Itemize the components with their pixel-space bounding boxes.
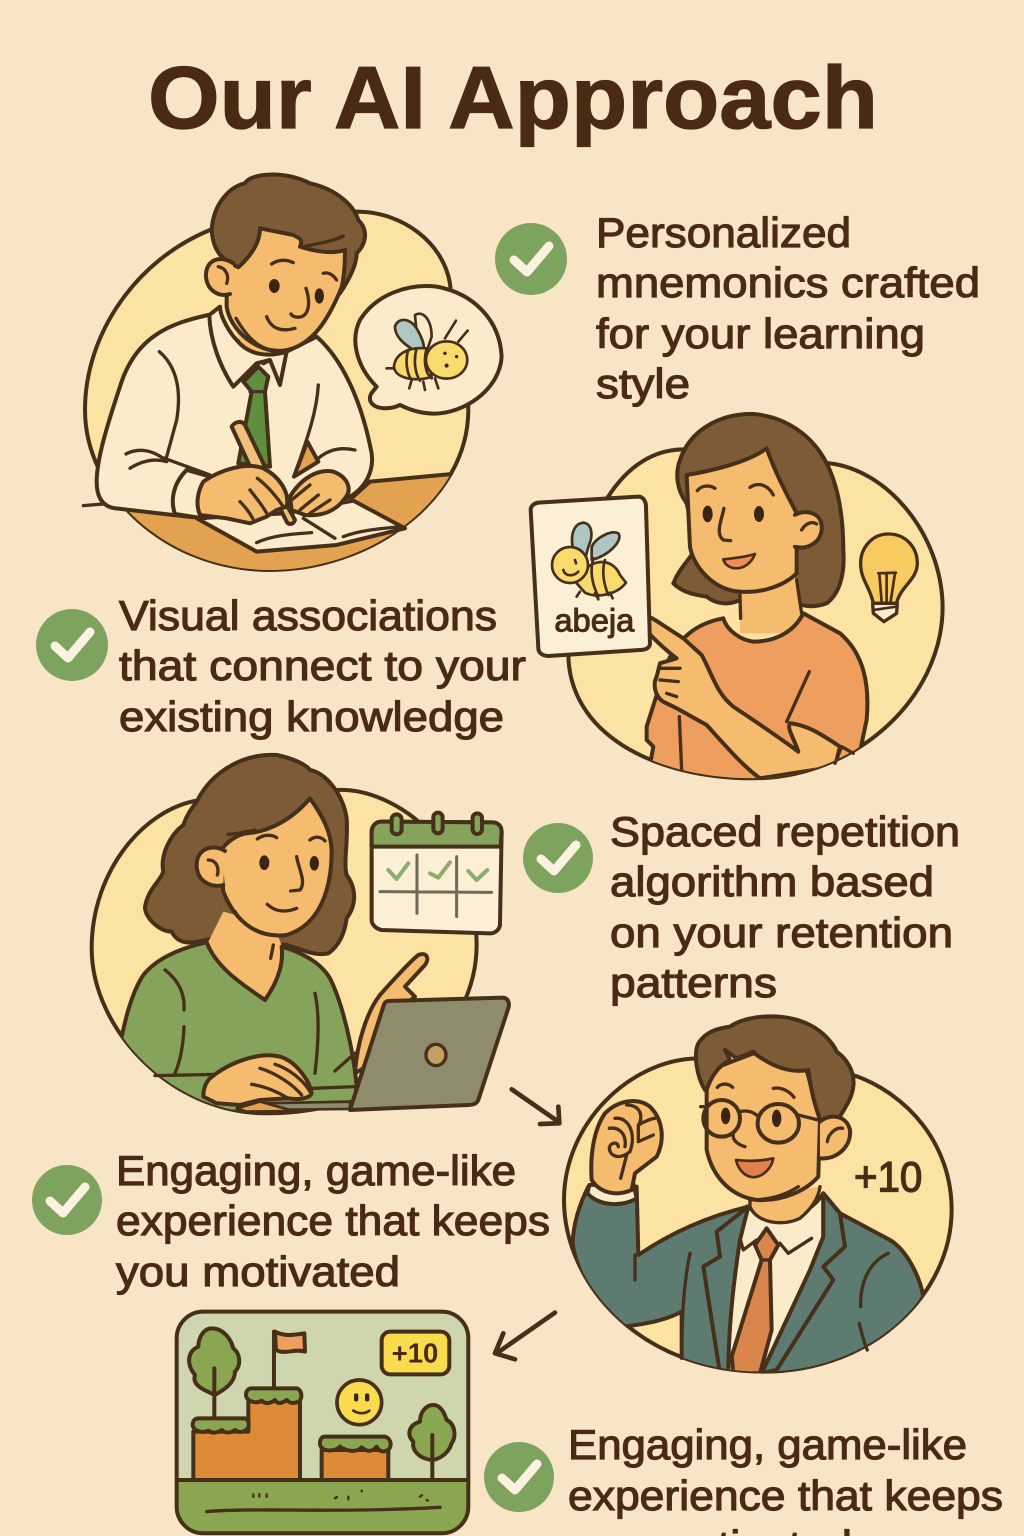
score badge [382,1332,449,1374]
illustration: woman pointing at flash card [531,414,943,783]
arrow to game [495,1313,555,1359]
desk [128,472,451,570]
neck [230,317,303,357]
text block: game-like experience [116,1147,550,1295]
collar [209,307,287,387]
text block: spaced repetition: on your retention [610,909,953,956]
text block: personalized mnemonics: Personalized [596,209,851,256]
check icon 2 [36,609,108,681]
ear [820,1117,850,1158]
arm and pointing hand [642,617,840,778]
tie [732,1228,778,1373]
hair [696,1016,854,1123]
text block: visual associations: existing knowledge [119,693,504,740]
shirt fold lines [126,352,355,477]
notebook [197,501,405,552]
hair [145,755,354,954]
text block: spaced repetition: patterns [610,959,777,1006]
illustration: woman with laptop and calendar [92,755,509,1113]
check icon 1 [495,223,567,295]
suit [573,1187,923,1377]
neck [207,912,283,1000]
face [707,1053,820,1200]
sweater [120,942,357,1112]
background blob [92,790,477,1113]
text block: personalized mnemonics: for your learning [596,310,925,357]
hand on keyboard [203,1055,312,1105]
hands [290,471,349,515]
bubble [355,286,502,414]
ear [206,259,233,295]
tie [238,367,270,467]
glasses [701,1100,818,1143]
chair patch [294,442,318,477]
text block: personalized mnemonics [596,209,980,407]
flash card [531,497,650,656]
text block: game-like experience: you motivated [116,1248,400,1295]
text block: visual associations [119,592,526,740]
illustration: man with glasses raising fist, arrows [495,1016,952,1377]
frame [177,1312,468,1533]
ground [178,1482,466,1532]
text block: spaced repetition [610,808,960,1006]
platforms [193,1388,391,1480]
bee wings [572,523,591,560]
shirt [727,1193,823,1377]
text block: visual associations: Visual associations [119,592,497,639]
smiley [337,1380,382,1425]
face [687,448,797,592]
eyes and eyebrows [269,279,280,293]
background blob [85,212,468,570]
thought bubble with bee [355,286,502,414]
calendar icon [372,813,502,933]
text block: game-like experience repeated: Engaging, game-like [568,1421,967,1468]
text block: game-like experience: Engaging, game-like [116,1147,516,1194]
lapels [703,1193,845,1373]
face [220,798,332,935]
neck [740,577,803,633]
light bulb icon [861,534,917,622]
hair [212,175,365,293]
illustration: man writing with bee thought bubble [70,175,502,593]
cuff [173,470,210,518]
bee body [394,348,432,379]
text block: spaced repetition: algorithm based [610,858,934,905]
card label: abeja [554,603,635,639]
illustration: game scene [177,1312,468,1536]
neck [750,1187,820,1223]
keyboard [262,1102,350,1110]
text block: personalized mnemonics: style [596,360,690,407]
text block: personalized mnemonics: mnemonics crafted [596,259,980,306]
facial features [259,855,269,870]
wings [415,314,432,352]
flag [274,1332,305,1387]
sky [177,1312,468,1533]
ear [795,512,822,548]
laptop [350,998,509,1110]
ear [197,847,225,886]
check icon 3 [523,823,593,893]
shirt [647,613,867,783]
text block: game-like experience repeated: experience that keeps [568,1472,1003,1519]
left tree [189,1328,239,1417]
bee body [577,562,626,595]
right tree [409,1405,454,1478]
text block: spaced repetition: Spaced repetition [610,808,960,855]
cuff [587,1183,637,1204]
facial features [703,506,713,522]
hair back [673,414,844,606]
arrow to man [512,1089,559,1124]
text block: game-like experience repeated [568,1421,1003,1536]
face [227,207,357,351]
pencil [232,422,265,470]
background blob [564,1058,952,1372]
raised hand [355,954,427,1073]
check icon 4 [32,1165,102,1235]
score badge: +10 [392,1338,438,1369]
check icon 5 [484,1442,554,1512]
background blob [568,449,943,778]
text block: visual associations: that connect to your [119,642,526,689]
text block: game-like experience: experience that keeps [116,1197,550,1244]
shirt [97,315,372,518]
facial features [721,1108,730,1124]
head [206,175,365,351]
plus ten label: +10 [854,1154,922,1202]
fist [591,1101,662,1193]
title: Our AI Approach [148,48,878,147]
